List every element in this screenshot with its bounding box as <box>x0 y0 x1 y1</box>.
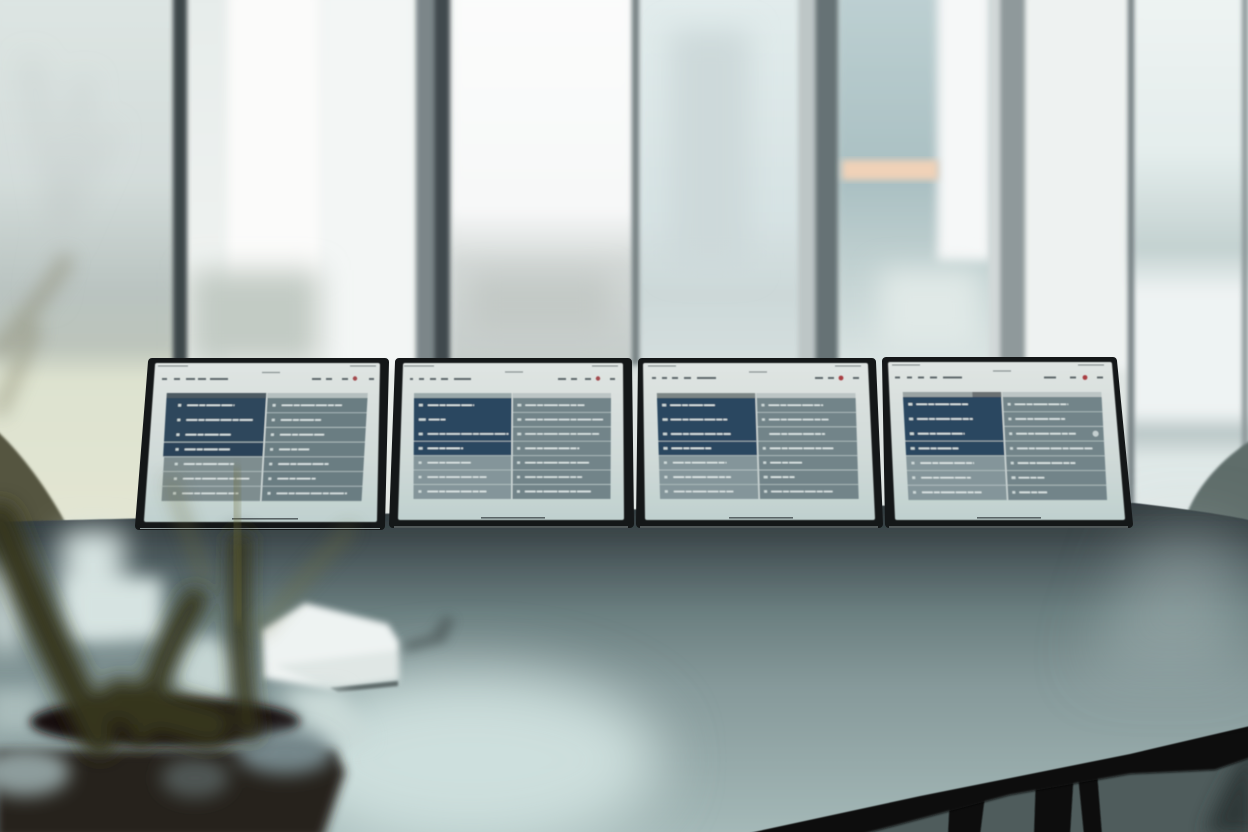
tablet 3 toolbar <box>648 366 861 380</box>
tablet 4 <box>886 361 1129 527</box>
table underside edge <box>730 722 1248 832</box>
left chair <box>0 425 65 526</box>
background: blurred window wall <box>0 0 1248 530</box>
tablet 4 body <box>886 361 1129 524</box>
tablet 2 <box>393 362 630 527</box>
plant reflections <box>0 578 370 745</box>
tablet 3 base highlight <box>640 526 878 528</box>
tablet 2 body <box>393 362 630 524</box>
tablet 2 home bar <box>481 517 545 519</box>
window frames <box>173 0 1248 520</box>
table top <box>0 503 1248 832</box>
blurred object beside box <box>405 615 455 652</box>
tablet 1 body <box>139 362 385 526</box>
tablet 2 base highlight <box>394 526 628 528</box>
tablet 4 screen <box>890 364 1123 518</box>
floor under the table <box>730 720 1248 832</box>
pot rim highlights <box>0 730 333 798</box>
tablet 4 task list <box>903 392 1107 500</box>
plant pot <box>0 698 345 832</box>
table legs <box>948 770 1102 832</box>
tablet 1 <box>139 362 385 528</box>
tablet 1 toolbar <box>158 366 376 381</box>
tablet 2 toolbar <box>404 366 618 381</box>
right chair <box>1186 436 1248 522</box>
blurred orange light strip <box>842 160 938 180</box>
tablet 3 home bar <box>729 517 793 519</box>
tablet 2 screen <box>400 365 622 518</box>
tablet 3 <box>640 362 879 527</box>
soil <box>30 698 300 746</box>
tablet 1 base highlight <box>140 528 380 530</box>
tablet 3 task list <box>657 393 859 499</box>
tablet 1 task list <box>161 393 368 501</box>
tablet 2 task list <box>413 393 611 499</box>
light reflections on table <box>280 530 1240 832</box>
tablet 1 screen <box>146 365 378 520</box>
shadow under tablets <box>138 529 1130 533</box>
right chair base shadow <box>1205 735 1248 832</box>
tablet 4 base highlight <box>889 526 1128 528</box>
tablet 4 toolbar <box>892 365 1104 380</box>
box shadow <box>330 681 398 692</box>
tablet 3 body <box>640 362 879 524</box>
white box on table <box>262 603 399 690</box>
tablet 4 home bar <box>977 517 1041 519</box>
plant stems <box>0 262 350 740</box>
tablet 1 home bar <box>232 518 298 520</box>
tablet 3 screen <box>645 365 873 518</box>
